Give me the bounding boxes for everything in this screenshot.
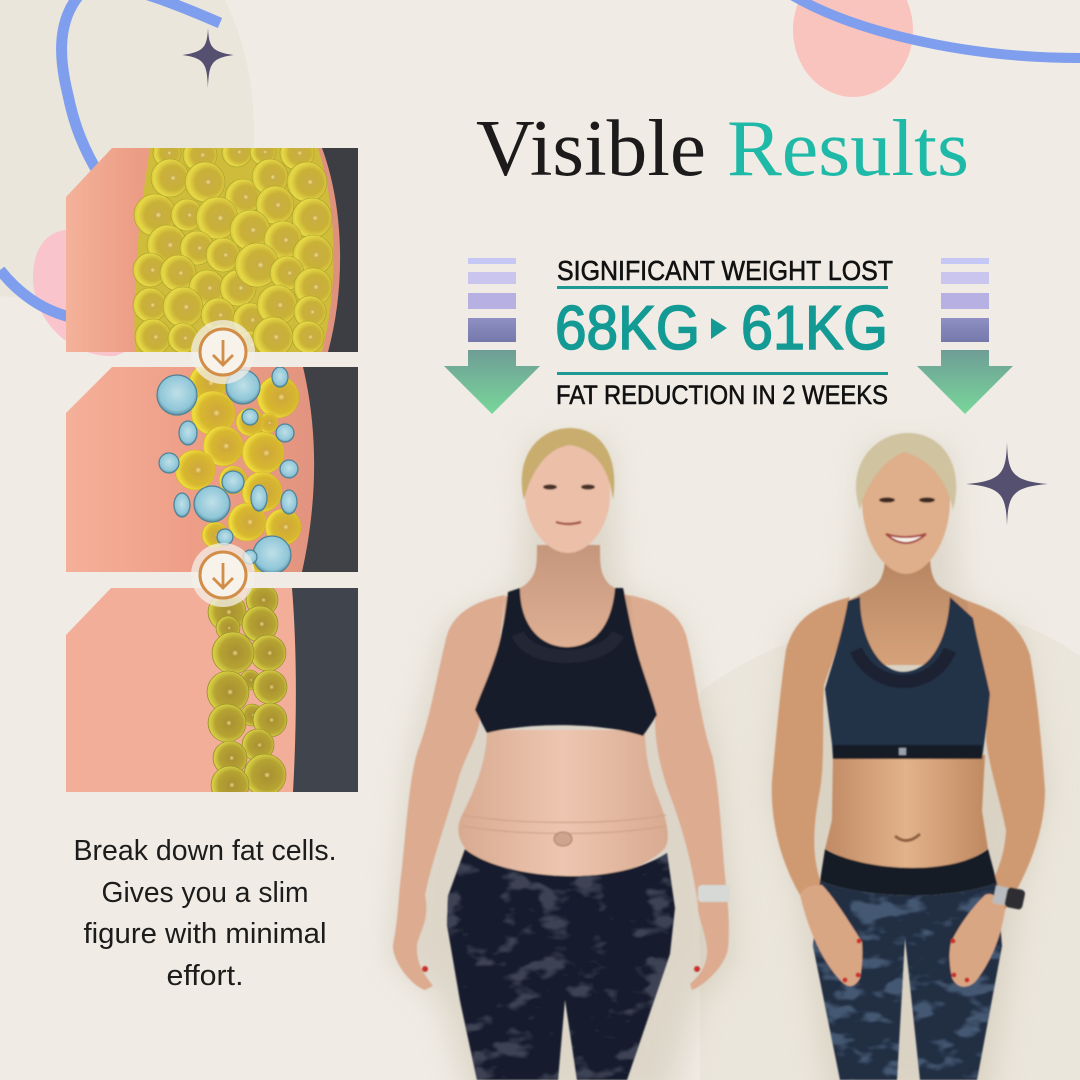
panel: fat cells before xyxy=(66,136,358,359)
bra logo xyxy=(899,748,906,755)
headline stat block: 61KG xyxy=(741,294,888,363)
fat cells xyxy=(133,136,333,359)
left arrow xyxy=(444,258,540,414)
icon: sparkle right xyxy=(966,442,1048,526)
photo: after person xyxy=(772,433,1045,1080)
leggings xyxy=(447,849,675,1080)
belly folds xyxy=(462,815,666,834)
panel: fat cells breaking down xyxy=(66,364,358,574)
face xyxy=(879,497,935,503)
text block: description: Break down fat cells. xyxy=(74,835,336,867)
icon: down arrow badge 2 xyxy=(191,543,255,607)
nails xyxy=(422,966,700,972)
sports bra xyxy=(475,588,657,736)
navel xyxy=(554,832,572,846)
headline stat block xyxy=(555,255,893,410)
left arm xyxy=(393,595,505,990)
right arrow xyxy=(917,258,1013,414)
watch xyxy=(992,884,1026,910)
watch xyxy=(698,885,730,902)
title: Visible xyxy=(476,105,706,193)
panel: fat cells after xyxy=(66,584,358,804)
dissolving cells xyxy=(157,367,298,574)
hair xyxy=(522,428,614,500)
face xyxy=(543,484,595,490)
nails xyxy=(842,938,970,982)
sports bra xyxy=(825,597,990,759)
leggings xyxy=(813,881,1002,1080)
chest and neck xyxy=(840,555,975,665)
head xyxy=(862,448,950,574)
head xyxy=(525,435,610,553)
hair xyxy=(856,433,956,510)
fat cells xyxy=(175,364,301,572)
bra band xyxy=(856,650,950,682)
left arm xyxy=(772,597,850,895)
right arm xyxy=(628,595,729,990)
torso skin xyxy=(825,755,988,872)
bra hem xyxy=(833,745,982,759)
title: Results xyxy=(727,105,969,193)
decorative curved lines xyxy=(0,0,1080,317)
headline stat block: 68KG xyxy=(555,294,700,363)
right arm xyxy=(965,600,1045,910)
icon: down arrow badge 1 xyxy=(191,320,255,384)
fat cells xyxy=(207,584,287,804)
navel xyxy=(895,834,920,841)
torso skin xyxy=(458,730,668,881)
title xyxy=(476,105,969,193)
text block: description: effort. xyxy=(166,960,244,992)
icon: sparkle top left xyxy=(182,28,234,88)
bra band xyxy=(518,634,618,656)
photo: before person xyxy=(393,428,730,1080)
headline stat block: SIGNIFICANT WEIGHT LOST xyxy=(557,255,893,286)
chest and neck xyxy=(500,545,640,660)
text block: description: figure with minimal xyxy=(84,918,326,950)
text block: description xyxy=(74,835,336,992)
shadow halo: before person xyxy=(390,440,735,1080)
headline stat block: FAT REDUCTION IN 2 WEEKS xyxy=(556,380,888,410)
shadow halo: after person xyxy=(770,445,1048,1080)
waistband xyxy=(820,849,997,896)
hands xyxy=(800,885,862,986)
text block: description: Gives you a slim xyxy=(102,877,308,909)
